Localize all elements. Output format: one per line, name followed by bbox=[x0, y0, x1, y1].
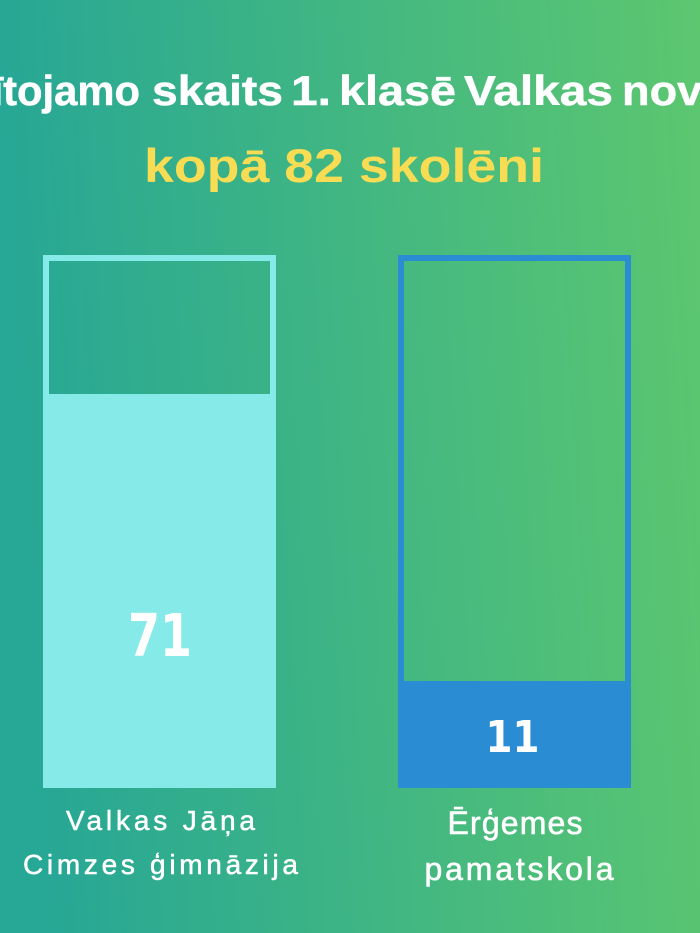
value: 11: 11 bbox=[486, 712, 540, 763]
panel: Ērģemes pamatskola bar bbox=[398, 258, 631, 788]
bar outline: left capacity bbox=[46, 258, 273, 785]
label: Ērģemes pamatskola: pamatskola bbox=[424, 851, 614, 887]
label: Valkas Jāņa Cimzes ģimnāzija: Valkas Jāņa bbox=[66, 805, 255, 836]
title: 1. bbox=[291, 67, 331, 114]
label: Valkas Jāņa Cimzes ģimnāzija bbox=[23, 805, 298, 880]
title: klasē bbox=[339, 67, 456, 114]
label: Valkas Jāņa Cimzes ģimnāzija: Cimzes ģimnāzija bbox=[23, 849, 298, 880]
label: Ērģemes pamatskola: Ērģemes bbox=[448, 805, 582, 841]
title bbox=[0, 67, 700, 114]
title: Valkas bbox=[464, 67, 613, 114]
title: skaits bbox=[152, 67, 283, 114]
bar outline: right capacity bbox=[401, 258, 628, 785]
bar fill: 11 pupils bbox=[398, 681, 631, 788]
label: Ērģemes pamatskola bbox=[424, 805, 614, 887]
subtitle: total pupils: kopā 82 skolēni bbox=[144, 139, 544, 192]
value: 71: 71 bbox=[128, 601, 192, 670]
panel: Valkas Jāņa Cimzes ģimnāzija bar bbox=[43, 258, 276, 788]
bar fill: 71 pupils bbox=[43, 394, 276, 788]
